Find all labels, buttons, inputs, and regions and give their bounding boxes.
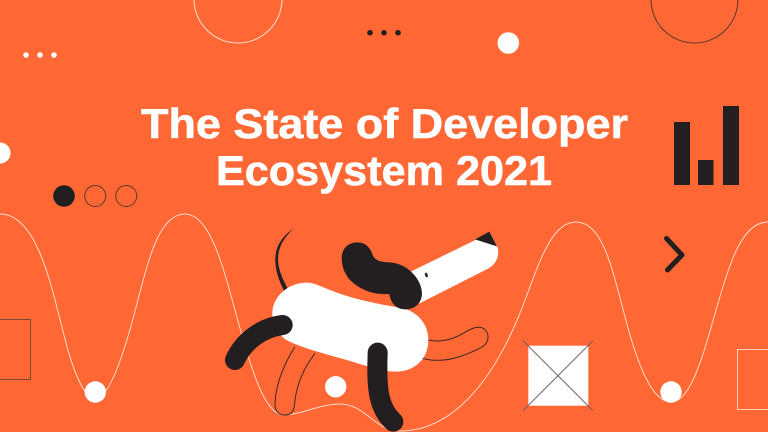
- dog front leg: [377, 353, 393, 422]
- dog illustration: [235, 228, 498, 422]
- three white dots: [23, 52, 57, 58]
- white circle top right: [498, 32, 519, 54]
- top outline circle: dark: [651, 0, 738, 43]
- dog tail: [275, 228, 294, 294]
- dog back leg outline: [275, 347, 315, 415]
- three dark dots: [367, 30, 401, 36]
- dog nose: [475, 232, 497, 246]
- white circle under dog: [325, 376, 346, 397]
- dog head: [410, 232, 498, 304]
- title: The State of Developer: [141, 100, 628, 147]
- white circle on wave right: [660, 381, 682, 403]
- dog front arm: [235, 325, 283, 360]
- dog eye: [424, 272, 428, 278]
- dog ear: [342, 242, 422, 309]
- white circle left edge: [0, 142, 11, 164]
- wave line: [0, 214, 768, 431]
- white crossed square: [523, 341, 593, 411]
- outline square right: [738, 350, 768, 410]
- pagination circles: [53, 185, 137, 207]
- dog body: [272, 283, 428, 372]
- title: Ecosystem 2021: [216, 147, 552, 194]
- top outline circle: white: [194, 0, 282, 43]
- icon: chevron arrow: [666, 238, 682, 270]
- white circle on wave left: [85, 381, 106, 403]
- title: [141, 100, 628, 194]
- icon: bar chart: [674, 106, 739, 185]
- dog far leg outline: [423, 327, 488, 360]
- outline square left: [0, 320, 30, 380]
